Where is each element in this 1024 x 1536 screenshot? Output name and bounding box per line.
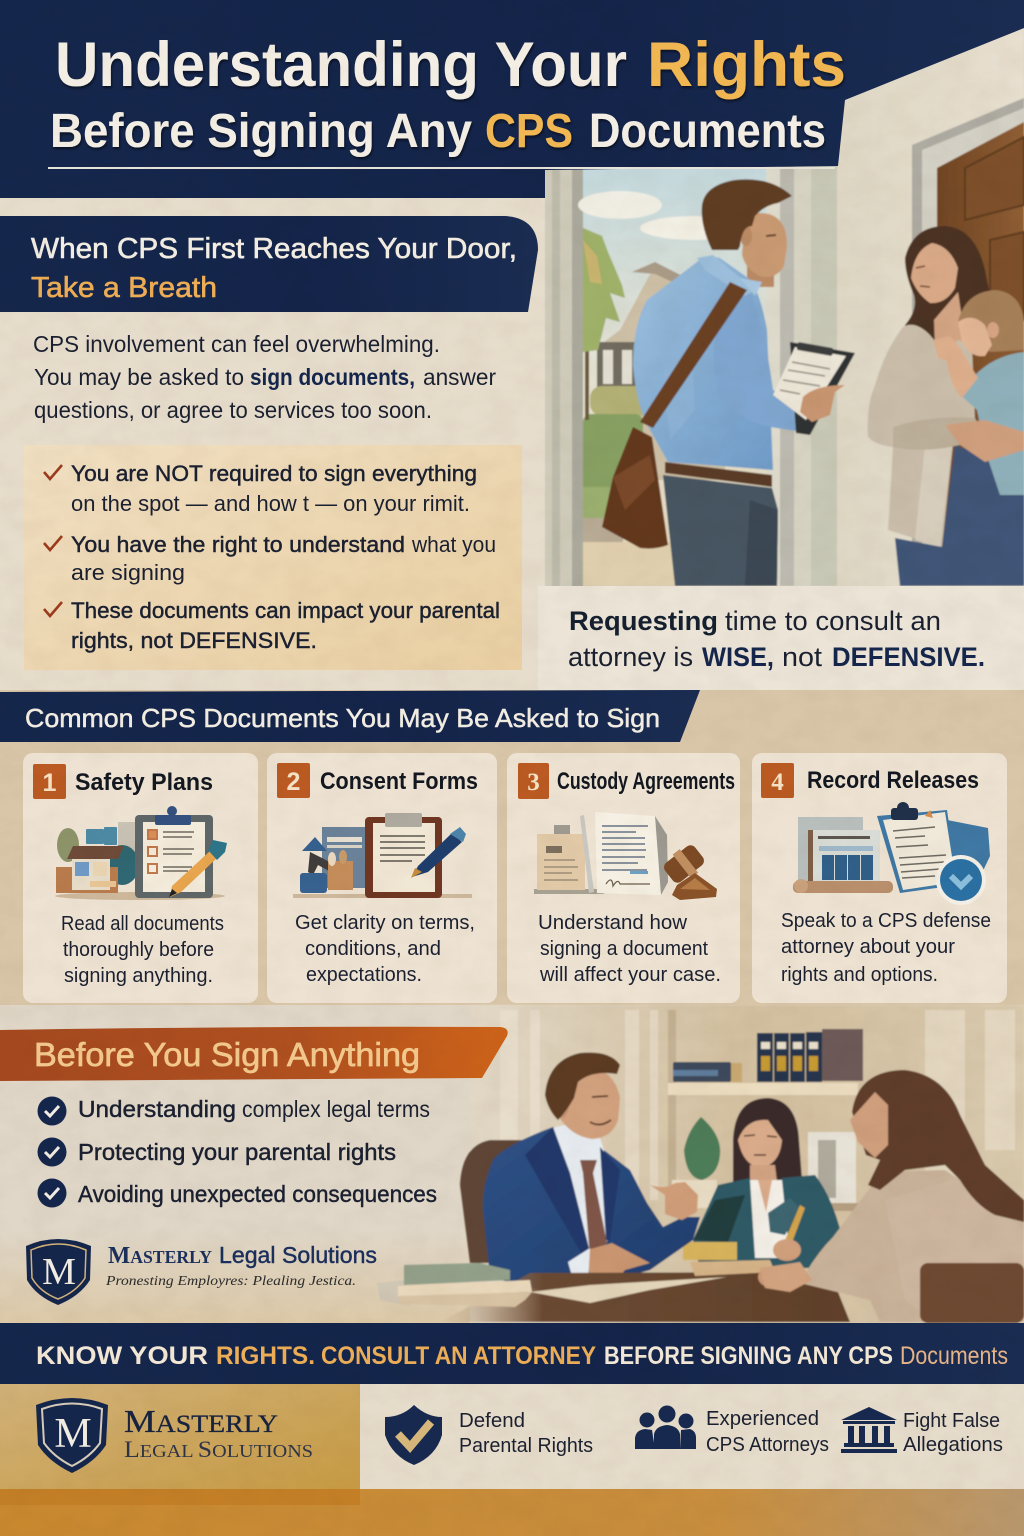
feature: fight false allegations: [841, 1407, 1003, 1456]
items: complex legal terms: [242, 1096, 430, 1122]
check items: [71, 461, 500, 653]
icon: courthouse: [841, 1407, 897, 1453]
card 2: consent forms: Consent Forms: [320, 768, 478, 795]
number badge: [277, 763, 310, 798]
icon: shield M: [36, 1398, 108, 1473]
footer: [0, 1384, 1024, 1536]
items: Understanding: [78, 1096, 236, 1122]
banner: know your rights: RIGHTS.: [216, 1342, 315, 1370]
garden view through window: [578, 191, 750, 586]
description: will affect your case.: [539, 964, 721, 986]
checklist box: [24, 445, 522, 670]
callout: requesting time: DEFENSIVE.: [832, 642, 985, 672]
card 1: safety plans: [23, 753, 258, 1003]
callout: requesting time: WISE,: [702, 642, 774, 672]
logo: footer shield and name: [36, 1398, 313, 1473]
panel: before you sign background: [0, 1005, 1024, 1323]
caseworker with shoulder bag and clipboard: [602, 179, 855, 586]
heading: before you sign anything: Before You Sign Anything: [34, 1036, 420, 1073]
banner: know your rights: Documents: [900, 1342, 1008, 1370]
callout: requesting time: Requesting: [569, 606, 718, 636]
check items: You have the right to understand: [71, 532, 405, 557]
number badge: [33, 764, 66, 799]
description: Read all documents: [61, 913, 224, 935]
description: expectations.: [306, 964, 422, 986]
description: Get clarity on terms,: [295, 912, 475, 934]
description: [61, 913, 224, 987]
callout: requesting time: time to consult an: [725, 606, 941, 636]
number badge: 4: [771, 769, 784, 796]
woman holding child: [868, 226, 1024, 586]
feature: defend parental rights: [385, 1405, 593, 1465]
logo: Masterly Legal Solutions: [26, 1239, 377, 1305]
icon: shield: [26, 1239, 91, 1305]
intro paragraph: You may be asked to: [34, 364, 244, 390]
description: Speak to a CPS defense: [781, 910, 991, 932]
logo: Masterly Legal Solutions: Legal Solutions: [219, 1242, 377, 1268]
description: attorney about your: [781, 936, 955, 958]
callout: requesting time: attorney is: [568, 642, 693, 672]
feature: fight false allegations: Allegations: [903, 1434, 1003, 1456]
description: [538, 912, 721, 986]
card 1: safety plans: Safety Plans: [75, 769, 213, 796]
card 3: custody agreements: [507, 753, 740, 1003]
card 4: record releases: [752, 753, 1007, 1003]
number badge: 3: [527, 769, 540, 796]
conference desk: [377, 1260, 850, 1322]
intro paragraph: [33, 331, 496, 423]
card 4: record releases: Record Releases: [807, 767, 979, 794]
wall and door frame: [545, 28, 1024, 590]
title: CPS: [485, 105, 573, 158]
callout: requesting time: not: [782, 642, 823, 672]
heading: common CPS documents: Common CPS Documents You May Be Asked to Sign: [25, 703, 660, 733]
icon: three people: [635, 1406, 696, 1449]
description: conditions, and: [305, 938, 441, 960]
banner: know your rights: BEFORE SIGNING ANY CPS: [604, 1342, 893, 1370]
check items: on the spot — and how t — on your rimit.: [71, 491, 470, 516]
description: [781, 910, 991, 986]
intro paragraph: answer: [423, 364, 496, 390]
attorney woman: [683, 1098, 845, 1275]
logo: footer shield and name: LEGAL SOLUTIONS: [124, 1437, 313, 1462]
icon: shield check: [385, 1405, 442, 1465]
description: signing anything.: [64, 965, 213, 987]
check items: rights, not DEFENSIVE.: [71, 628, 317, 653]
intro paragraph: CPS involvement can feel overwhelming.: [33, 331, 440, 357]
title: Before Signing Any: [50, 105, 472, 158]
callout: requesting time: [538, 586, 1024, 690]
client woman: [760, 1070, 1024, 1323]
logo: Masterly Legal Solutions: Pronesting Employres: Plealing Jestica.: [105, 1274, 356, 1289]
banner: know your rights: KNOW YOUR: [36, 1342, 208, 1370]
description: signing a document: [540, 938, 708, 960]
illustration: caseworker at family's door: [545, 28, 1024, 590]
card 2: consent forms: [267, 753, 497, 1003]
feature: defend parental rights: Parental Rights: [459, 1435, 593, 1457]
check items: You are NOT required to sign everything: [71, 461, 477, 486]
icon: house and checklist clipboard: [55, 806, 227, 900]
bullet icons: [38, 1096, 66, 1208]
logo: Masterly Legal Solutions: MASTERLY: [108, 1243, 212, 1269]
heading: common CPS documents: [0, 690, 700, 742]
description: rights and options.: [781, 964, 938, 986]
items: Protecting your parental rights: [78, 1139, 396, 1165]
banner: know your rights: [0, 1323, 1024, 1384]
checklist: before you sign: [38, 1096, 437, 1208]
stacked books: [377, 1263, 532, 1307]
intro paragraph: questions, or agree to services too soon.: [34, 397, 432, 423]
feature: experienced CPS attorneys: Experienced: [706, 1408, 819, 1430]
description: [295, 912, 475, 986]
heading: before you sign anything: [0, 1027, 508, 1081]
title: Documents: [589, 105, 826, 158]
feature: experienced CPS attorneys: [635, 1406, 829, 1456]
card 3: custody agreements: Custody Agreements: [557, 768, 735, 795]
icon: shield: M: [42, 1251, 76, 1293]
panel: when CPS first reaches your door: [0, 216, 538, 670]
title: [50, 30, 846, 158]
number badge: [761, 763, 794, 798]
feature: experienced CPS attorneys: CPS Attorneys: [706, 1434, 829, 1456]
check items: These documents can impact your parental: [71, 598, 500, 623]
description: thoroughly before: [63, 939, 214, 961]
icon: shield M: M: [54, 1411, 92, 1457]
check items: are signing: [71, 560, 185, 585]
items: Avoiding unexpected consequences: [78, 1181, 437, 1207]
attorney man in suit: [460, 1052, 700, 1290]
illustration: attorney consultation in office: [377, 1005, 1024, 1323]
door: [937, 122, 1024, 586]
icon: document and clipboard with pen: [293, 813, 472, 898]
title: Understanding Your: [55, 30, 627, 100]
number badge: 2: [287, 768, 300, 796]
number badge: [518, 763, 549, 799]
heading banner: Take a Breath: [31, 272, 217, 304]
icon: documents and gavel: [534, 812, 717, 900]
header band: [0, 0, 1024, 198]
heading banner: When CPS First Reaches Your Door,: [31, 233, 517, 265]
items: [78, 1096, 437, 1207]
title: Rights: [647, 30, 846, 100]
intro paragraph: sign documents,: [250, 364, 415, 390]
office wall and shelves: [470, 1005, 1024, 1323]
description: Understand how: [538, 912, 688, 934]
banner: know your rights: CONSULT AN ATTORNEY: [321, 1342, 596, 1370]
number badge: 1: [43, 769, 57, 797]
logo: footer shield and name: MASTERLY: [124, 1403, 278, 1439]
check marks: [44, 465, 62, 616]
feature: defend parental rights: Defend: [459, 1410, 525, 1432]
check items: what you: [411, 532, 496, 557]
feature: fight false allegations: Fight False: [903, 1410, 1000, 1432]
icon: records, clipboard and check badge: [793, 802, 990, 905]
heading banner: [0, 216, 538, 312]
